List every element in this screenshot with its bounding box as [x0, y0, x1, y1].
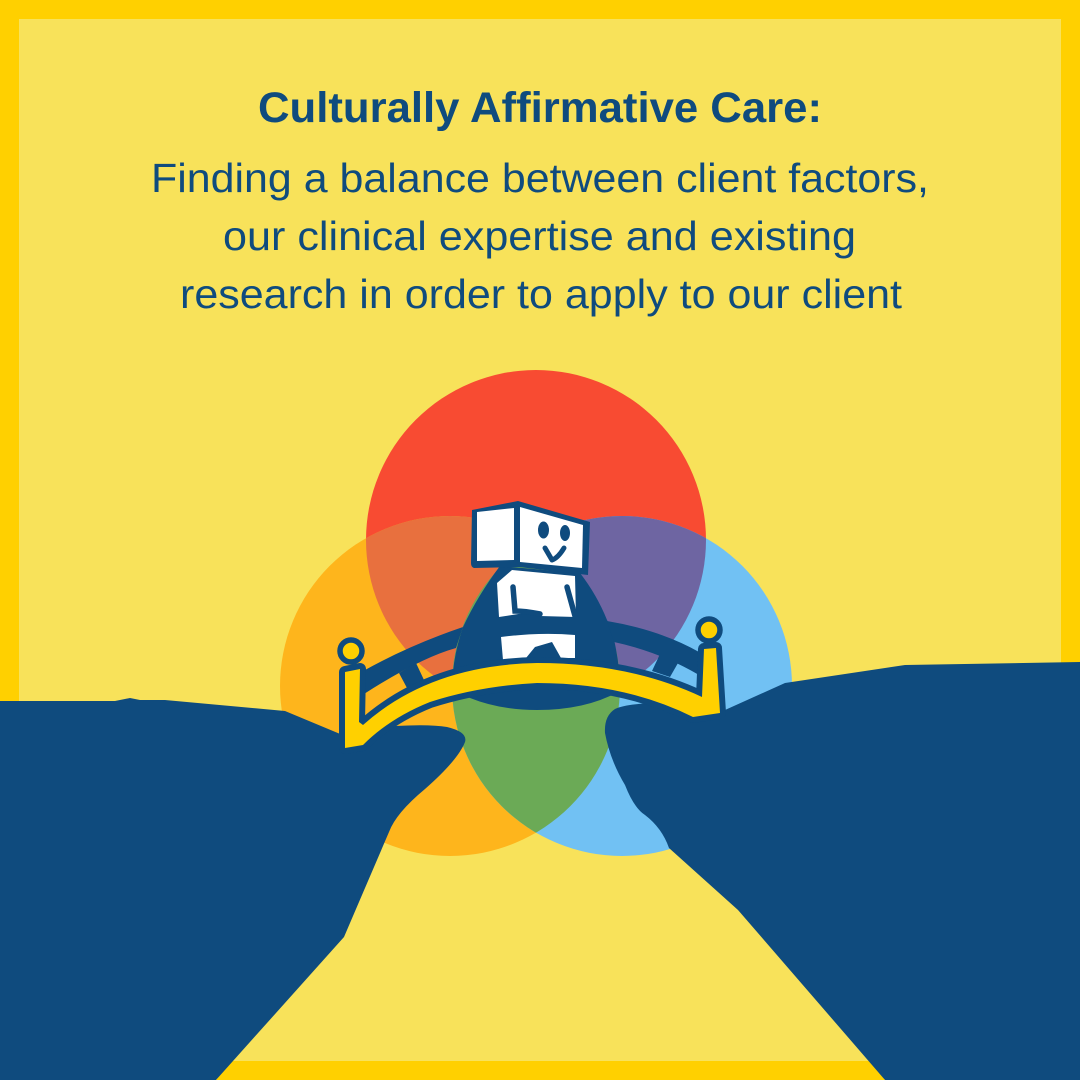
finial: right [698, 619, 720, 641]
cliff: right [605, 662, 1080, 1080]
rail: right [607, 621, 699, 675]
finial: left [340, 640, 362, 662]
subtitle [151, 155, 929, 317]
bridge deck [345, 648, 720, 748]
character on bridge [453, 501, 619, 710]
head [471, 501, 590, 575]
arms [513, 587, 575, 616]
subtitle: Finding a balance between client factors, [151, 155, 929, 201]
circle: orange [280, 516, 620, 856]
circle: blue [452, 516, 792, 856]
subtitle: our clinical expertise and existing [223, 213, 856, 259]
character body silhouette [453, 566, 619, 710]
rail: left [364, 627, 463, 694]
smile [545, 548, 564, 560]
circle: red [366, 370, 706, 710]
overlap: orange and blue [452, 567, 620, 832]
cliff: left [0, 698, 465, 1080]
venn diagram [280, 370, 792, 856]
eyes [538, 522, 549, 538]
legs [501, 634, 575, 660]
rail post: left [399, 663, 424, 688]
overlap: red and orange [366, 516, 499, 676]
subtitle: research in order to apply to our client [180, 271, 903, 317]
bridge [340, 619, 720, 748]
rail post: right [652, 654, 678, 677]
title: Culturally Affirmative Care: [258, 84, 822, 132]
torso [497, 570, 576, 617]
overlap: red and blue [452, 516, 706, 670]
bottom border strip [216, 1061, 885, 1080]
